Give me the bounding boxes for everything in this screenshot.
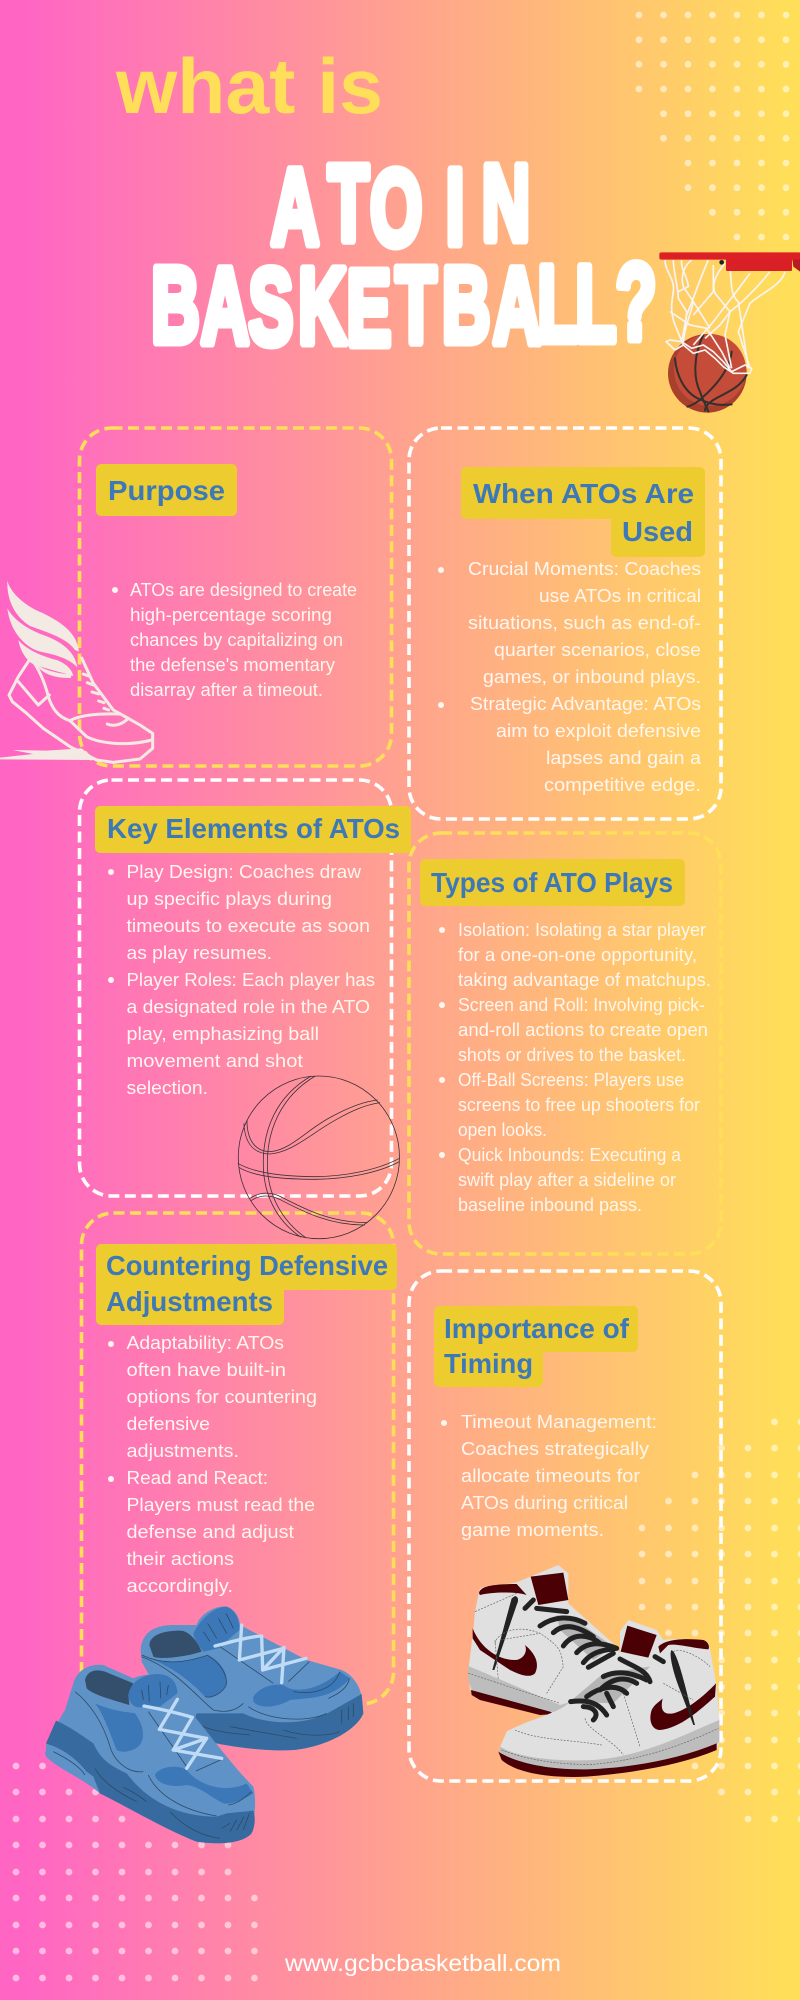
- heading: Types of ATO Plays: [420, 859, 685, 906]
- bullet list: Key Elements: as play resumes.: [126, 942, 272, 963]
- bullet list: Countering: their actions: [126, 1548, 234, 1569]
- bullet list: Countering: adjustments.: [126, 1440, 239, 1461]
- bullet list: Purpose: [112, 579, 357, 700]
- bullet list: When ATOs Are Used: Strategic Advantage: ATOs: [470, 693, 701, 714]
- title: ATO IN BASKETBALL?: BASKETBALL?: [151, 243, 657, 369]
- dot pattern: lower left: [16, 1766, 256, 1978]
- bullet list: Key Elements: Play Design: Coaches draw: [126, 861, 362, 882]
- bullet list: Countering: accordingly.: [126, 1575, 233, 1596]
- panel: Purpose: [80, 428, 392, 766]
- panel: When ATOs Are Used: [409, 428, 721, 819]
- bullet list: Types of ATO Plays: baseline inbound pass.: [458, 1194, 642, 1215]
- bullet list: Types of ATO Plays: [439, 919, 711, 1215]
- bullet list: When ATOs Are Used: competitive edge.: [544, 774, 701, 795]
- bullet list: Countering: [108, 1332, 317, 1596]
- bullet list: Importance of Timing: allocate timeouts for: [461, 1465, 640, 1486]
- bullet list: Purpose: ATOs are designed to create: [130, 579, 357, 600]
- bullet list: When ATOs Are Used: use ATOs in critical: [539, 585, 701, 606]
- bullet list: Types of ATO Plays: for a one-on-one opportunity,: [458, 944, 697, 965]
- bullet list: Key Elements: a designated role in the ATO: [126, 996, 370, 1017]
- title: what is: what is: [115, 42, 383, 130]
- bullet list: Types of ATO Plays: screens to free up shooters for: [458, 1094, 700, 1115]
- bullet list: Key Elements: play, emphasizing ball: [126, 1023, 319, 1044]
- bullet list: Key Elements: timeouts to execute as soon: [126, 915, 370, 936]
- bullet list: Importance of Timing: Timeout Management:: [461, 1411, 657, 1432]
- bullet list: Countering: defensive: [126, 1413, 210, 1434]
- dot pattern: top right: [639, 15, 790, 237]
- heading: Countering Defensive Adjustments: [96, 1244, 397, 1325]
- bullet list: Importance of Timing: [441, 1411, 657, 1540]
- heading: Key Elements of ATOs: Key Elements of ATOs: [107, 813, 400, 844]
- bullet list: Countering: Players must read the: [126, 1494, 315, 1515]
- bullet list: Purpose: chances by capitalizing on: [130, 629, 343, 650]
- bullet list: Countering: often have built-in: [126, 1359, 286, 1380]
- back blue shoe: [141, 1606, 363, 1750]
- bullet list: When ATOs Are Used: situations, such as end-of-: [468, 612, 701, 633]
- bullet list: Purpose: the defense's momentary: [130, 654, 336, 675]
- heading: Purpose: [96, 464, 237, 516]
- heading: Countering Defensive Adjustments: Adjustments: [106, 1286, 273, 1317]
- icon: white and maroon sneakers: [468, 1565, 719, 1777]
- bullet list: Types of ATO Plays: Isolation: Isolating a star player: [458, 919, 706, 940]
- heading: Importance of Timing: Timing: [444, 1348, 533, 1379]
- title: ATO IN BASKETBALL?: [151, 144, 657, 369]
- panel: Types of ATO Plays: [409, 833, 721, 1254]
- bullet list: Importance of Timing: game moments.: [461, 1519, 604, 1540]
- heading: When ATOs Are Used: When ATOs Are: [473, 478, 694, 509]
- bullet list: Types of ATO Plays: swift play after a sideline or: [458, 1169, 676, 1190]
- panel: Countering Defensive Adjustments: [82, 1213, 397, 1704]
- bullet list: Key Elements: Player Roles: Each player has: [126, 969, 375, 990]
- bullet list: Countering: Read and React:: [126, 1467, 268, 1488]
- dot pattern: lower right: [642, 1422, 800, 1819]
- bullet list: Countering: Adaptability: ATOs: [126, 1332, 284, 1353]
- bullet list: When ATOs Are Used: Crucial Moments: Coaches: [468, 558, 701, 579]
- bullet list: When ATOs Are Used: quarter scenarios, close: [494, 639, 701, 660]
- bullet list: Types of ATO Plays: Off-Ball Screens: Players use: [458, 1069, 684, 1090]
- bullet list: Key Elements: up specific plays during: [126, 888, 332, 909]
- bullet list: Countering: defense and adjust: [126, 1521, 294, 1542]
- bullet list: Types of ATO Plays: open looks.: [458, 1119, 547, 1140]
- bullet list: Types of ATO Plays: and-roll actions to create open: [458, 1019, 708, 1040]
- heading: Importance of Timing: Importance of: [444, 1313, 630, 1344]
- bullet list: Types of ATO Plays: Quick Inbounds: Executing a: [458, 1144, 682, 1165]
- bullet list: When ATOs Are Used: games, or inbound plays.: [483, 666, 701, 687]
- bullet list: Purpose: disarray after a timeout.: [130, 679, 323, 700]
- bullet list: Importance of Timing: Coaches strategically: [461, 1438, 650, 1459]
- bullet list: Countering: options for countering: [126, 1386, 317, 1407]
- heading: Importance of Timing: [434, 1306, 638, 1387]
- front blue shoe: [45, 1665, 255, 1843]
- heading: When ATOs Are Used: [461, 467, 705, 557]
- title: ATO IN BASKETBALL?: ATO IN: [271, 144, 530, 269]
- bullet list: Purpose: high-percentage scoring: [130, 604, 332, 625]
- icon: winged shoe: [0, 581, 153, 762]
- bullet list: Types of ATO Plays: shots or drives to the basket.: [458, 1044, 686, 1065]
- icon: basketball outline: [238, 1076, 399, 1239]
- bullet list: When ATOs Are Used: lapses and gain a: [546, 747, 702, 768]
- bullet list: When ATOs Are Used: aim to exploit defensive: [496, 720, 701, 741]
- footer: website URL: www.gcbcbasketball.com: [284, 1950, 561, 1976]
- icon: blue sneakers: [45, 1606, 363, 1843]
- bullet list: Key Elements: movement and shot: [126, 1050, 303, 1071]
- bullet list: Types of ATO Plays: Screen and Roll: Involving pick-: [458, 994, 705, 1015]
- bullet list: Types of ATO Plays: taking advantage of matchups.: [458, 969, 711, 990]
- icon: basketball hoop with ball: [659, 252, 800, 413]
- bullet list: Key Elements: [108, 861, 375, 1098]
- bullet list: Key Elements: selection.: [126, 1077, 208, 1098]
- heading: Key Elements of ATOs: [95, 806, 411, 853]
- heading: Purpose: Purpose: [108, 475, 225, 506]
- front white shoe: [498, 1620, 719, 1777]
- heading: Countering Defensive Adjustments: Countering Defensive: [106, 1250, 388, 1281]
- bullet list: When ATOs Are Used: [438, 558, 702, 795]
- heading: When ATOs Are Used: Used: [622, 516, 693, 547]
- heading: Types of ATO Plays: Types of ATO Plays: [431, 867, 673, 898]
- panel: Key Elements of ATOs: [80, 780, 411, 1196]
- panel: Importance of Timing: [409, 1271, 721, 1781]
- bullet list: Importance of Timing: ATOs during critical: [461, 1492, 628, 1513]
- back white shoe: [468, 1565, 623, 1715]
